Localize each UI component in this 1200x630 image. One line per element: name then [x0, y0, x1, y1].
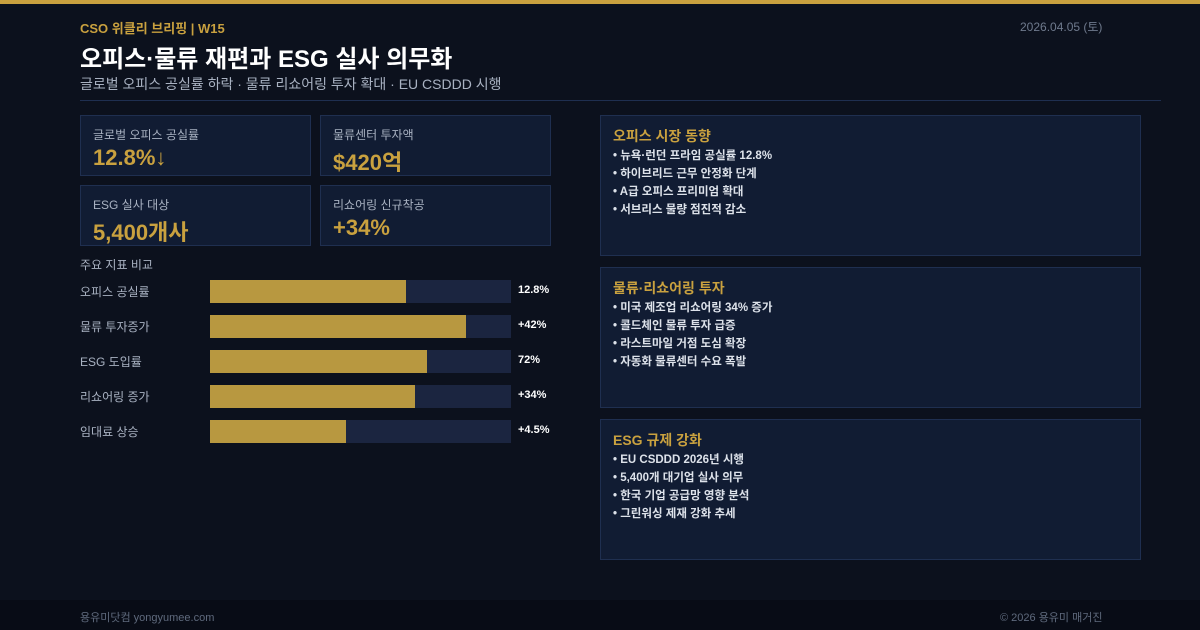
panel: esg — [600, 419, 1141, 560]
kpi: logistics investment: $420억 — [333, 150, 402, 175]
footer: © 2026 용유미 매거진 — [1000, 612, 1102, 624]
panel: esg: • EU CSDDD 2026년 시행 — [613, 454, 744, 466]
kpi: reshoring — [320, 185, 551, 246]
bar chart: 오피스 공실률 — [80, 285, 150, 299]
bar chart: 72% — [518, 354, 540, 366]
bar chart: 임대료 상승 — [80, 425, 139, 439]
panel: logistics: • 자동화 물류센터 수요 폭발 — [613, 356, 746, 368]
footer — [0, 600, 1200, 630]
kicker: CSO 위클리 브리핑 | W15 — [80, 21, 225, 36]
bar chart: ESG 도입률 — [80, 355, 142, 369]
panel: esg: • 5,400개 대기업 실사 의무 — [613, 472, 743, 484]
panel: office market — [600, 115, 1141, 256]
kpi: vacancy — [80, 115, 311, 176]
panel: office market: • 뉴욕·런던 프라임 공실률 12.8% — [613, 150, 772, 162]
panel: office market: • A급 오피스 프리미엄 확대 — [613, 186, 743, 198]
panel: logistics — [600, 267, 1141, 408]
kpi: vacancy: 12.8%↓ — [93, 145, 166, 170]
panel: office market: • 서브리스 물량 점진적 감소 — [613, 204, 746, 216]
kpi: reshoring: +34% — [333, 215, 390, 240]
kpi: vacancy: 글로벌 오피스 공실률 — [93, 128, 199, 142]
top accent bar — [0, 0, 1200, 4]
panel: office market: 오피스 시장 동향 — [613, 128, 711, 144]
panel: logistics: • 콜드체인 물류 투자 급증 — [613, 320, 736, 332]
panel: office market: • 하이브리드 근무 안정화 단계 — [613, 168, 757, 180]
bar chart: +34% — [518, 389, 546, 401]
subtitle: 글로벌 오피스 공실률 하락 · 물류 리쇼어링 투자 확대 · EU CSDDD 시행 — [80, 76, 501, 92]
chart heading: 주요 지표 비교 — [80, 258, 153, 272]
kpi: logistics investment — [320, 115, 551, 176]
panel: esg: • 그린워싱 제재 강화 추세 — [613, 508, 736, 520]
title: 오피스·물류 재편과 ESG 실사 의무화 — [80, 46, 452, 73]
kpi: logistics investment: 물류센터 투자액 — [333, 128, 414, 142]
bar chart — [80, 280, 550, 443]
panel: logistics: • 라스트마일 거점 도심 확장 — [613, 338, 746, 350]
kpi: reshoring: 리쇼어링 신규착공 — [333, 198, 425, 212]
bar chart: 물류 투자증가 — [80, 320, 150, 334]
panel: logistics: • 미국 제조업 리쇼어링 34% 증가 — [613, 302, 772, 314]
bar chart: +42% — [518, 319, 546, 331]
bar chart: +4.5% — [518, 424, 550, 436]
panel: logistics: 물류·리쇼어링 투자 — [613, 280, 725, 296]
bar chart: 리쇼어링 증가 — [80, 390, 150, 404]
bar chart: 12.8% — [518, 284, 549, 296]
date: 2026.04.05 (토) — [1020, 20, 1102, 34]
kpi: esg — [80, 185, 311, 246]
kpi: esg: ESG 실사 대상 — [93, 198, 169, 212]
footer: 용유미닷컴 yongyumee.com — [80, 612, 214, 624]
panel: esg: • 한국 기업 공급망 영향 분석 — [613, 490, 749, 502]
panel: esg: ESG 규제 강화 — [613, 432, 702, 448]
kpi: esg: 5,400개사 — [93, 220, 189, 245]
